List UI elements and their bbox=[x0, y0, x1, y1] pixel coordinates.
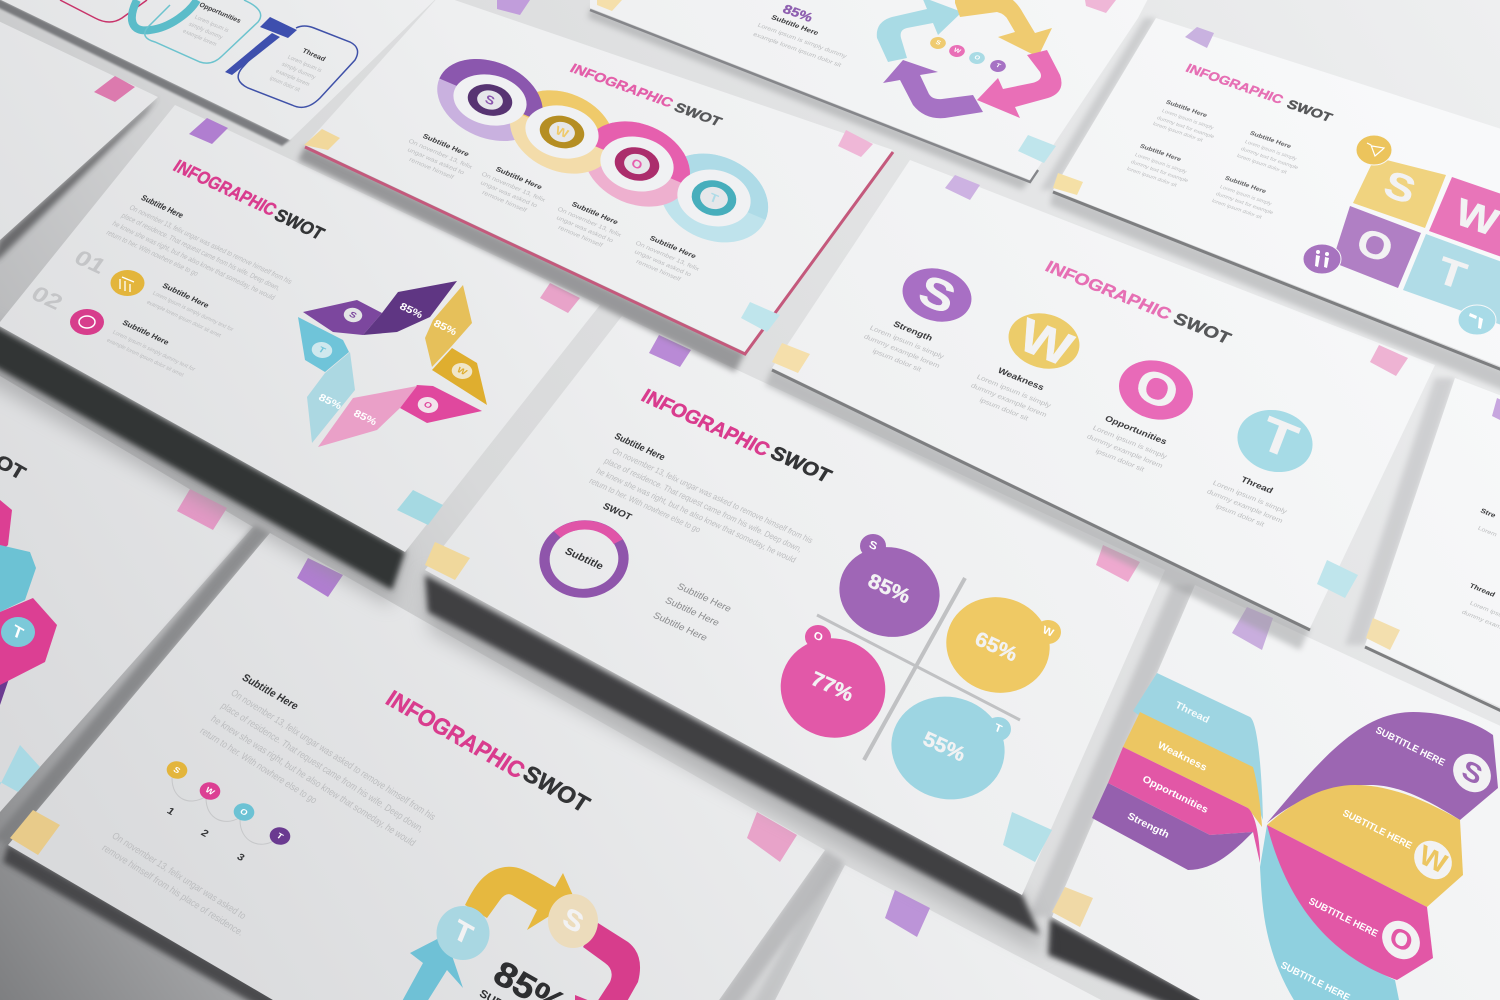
star diagram: 85% bbox=[398, 301, 425, 321]
text block: return to her. With nowhere else to go bbox=[198, 725, 319, 806]
target W: W bbox=[554, 123, 571, 141]
text columns: dummy text for example bbox=[1130, 160, 1189, 184]
numbered list: example lorem ipsum dolor sit amet bbox=[105, 337, 185, 378]
title: SWOT bbox=[766, 443, 835, 487]
hexagon stack: T bbox=[10, 620, 26, 644]
item: thread bbox=[1205, 402, 1320, 528]
text columns: Lorem ipsum is simply bbox=[1244, 140, 1298, 162]
butterfly right wing bbox=[1260, 712, 1498, 1000]
butterfly left wing: Opportunities bbox=[1140, 774, 1210, 816]
text block: place of residence. That request came from his wife. Deep down, bbox=[219, 700, 426, 835]
item: thread: Lorem ipsum is simply bbox=[1211, 479, 1289, 515]
text columns: Subtitle Here bbox=[1223, 175, 1268, 195]
tile S: S bbox=[1379, 162, 1421, 212]
text columns: Subtitle Here bbox=[1164, 99, 1209, 119]
butterfly right wing: S bbox=[1458, 754, 1486, 792]
stat: 85% bbox=[780, 1, 816, 25]
title: SWOT bbox=[1284, 97, 1336, 125]
tile O: O bbox=[1352, 219, 1398, 271]
item: weakness: Lorem ipsum is simply bbox=[975, 373, 1053, 409]
captions: On november 13, felix bbox=[634, 240, 701, 273]
swot step chain bbox=[163, 758, 294, 864]
panel: top arrow cycle slide bbox=[588, 0, 1150, 190]
labels bbox=[181, 1, 328, 93]
swot step chain: 3 bbox=[235, 851, 247, 864]
butterfly right wing: SUBTITLE HERE bbox=[1374, 725, 1446, 769]
target O: O bbox=[630, 155, 644, 173]
captions: remove himself bbox=[408, 157, 455, 181]
captions: On november 13, felix bbox=[480, 171, 547, 204]
item: opportunities: ipsum dolor sit bbox=[1094, 447, 1146, 473]
bubble O 77%: O bbox=[812, 630, 824, 644]
item: opportunities: O bbox=[1128, 357, 1186, 421]
icon: phone badge bbox=[70, 309, 104, 335]
swot step chain: 1 bbox=[165, 805, 177, 818]
stat: example lorem ipsum dolor sit bbox=[752, 31, 843, 69]
title: SWOT bbox=[671, 101, 724, 130]
numbered list: example lorem ipsum dolor sit amet bbox=[145, 299, 222, 339]
star diagram: O bbox=[422, 400, 434, 410]
panel: right edge slide: Thread bbox=[1468, 581, 1497, 599]
text block: he knew she was right, but he also knew that someday, he would bbox=[111, 220, 277, 302]
legend bbox=[651, 581, 733, 644]
arrow cycle: O bbox=[973, 54, 981, 62]
swot step chain: 2 bbox=[199, 827, 211, 840]
star diagram: 85% bbox=[352, 408, 379, 428]
tile T: T bbox=[1432, 248, 1472, 298]
item: weakness: W bbox=[1012, 308, 1080, 377]
text block: Subtitle Here bbox=[139, 193, 185, 220]
text block: Subtitle Here bbox=[612, 431, 667, 463]
hexagon stack bbox=[0, 500, 57, 705]
bubble W 65% bbox=[935, 586, 1061, 704]
item: opportunities: dummy example lorem bbox=[1085, 432, 1165, 470]
icon: people bbox=[1303, 244, 1341, 274]
target rings bbox=[425, 44, 782, 259]
captions: ungar was asked to bbox=[406, 147, 466, 176]
captions: remove himself bbox=[557, 225, 604, 249]
bubble T 55% bbox=[880, 684, 1016, 812]
tile T bbox=[1403, 234, 1500, 328]
stat: Lorem ipsum is simply dummy bbox=[756, 22, 849, 60]
text block: On november 13, felix ungar was asked to remove himself from his bbox=[610, 446, 815, 545]
item: thread: ipsum dolor sit bbox=[1214, 502, 1266, 528]
title: INFOGRAPHIC bbox=[1042, 257, 1175, 323]
arrow cycle: T bbox=[994, 63, 1002, 69]
swot step chain: S bbox=[172, 765, 183, 775]
title bbox=[1183, 61, 1336, 125]
bubble O 77% bbox=[769, 625, 897, 749]
item: weakness: Weakness bbox=[996, 366, 1046, 392]
captions: ungar was asked to bbox=[555, 215, 615, 244]
swot step chain: T bbox=[275, 831, 286, 842]
text block: return to her. With nowhere else to go bbox=[587, 476, 703, 534]
text columns: lorem ipsum dolor sit bbox=[1236, 154, 1288, 176]
captions: Subtitle Here bbox=[494, 165, 544, 191]
arrow cycle bbox=[400, 867, 640, 1000]
panel: bottom left slide with arrow cycle bbox=[0, 525, 844, 1000]
butterfly right wing: SUBTITLE HERE bbox=[1307, 896, 1379, 940]
text block: he knew she was right, but he also knew that someday, he would bbox=[209, 713, 418, 849]
legend: Subtitle Here bbox=[663, 595, 721, 629]
target O bbox=[595, 130, 679, 198]
numbered list: 01 bbox=[72, 245, 108, 280]
arrow cycle: S bbox=[934, 39, 943, 47]
numbered list: 02 bbox=[29, 281, 65, 316]
panel: top left outlined SWOT slide bbox=[0, 0, 445, 146]
item: strength bbox=[862, 261, 978, 373]
captions: On november 13, felix bbox=[407, 138, 474, 171]
donut chart: Subtitle bbox=[563, 546, 605, 572]
lower text block bbox=[100, 830, 248, 938]
lower text block: On november 13, felix ungar was asked to bbox=[110, 830, 248, 922]
text columns: dummy text for example bbox=[1240, 147, 1299, 171]
arrow cycle: S bbox=[558, 902, 588, 940]
text block: return to her. With nowhere else to go bbox=[105, 229, 200, 278]
arrow cycle: T bbox=[449, 914, 477, 952]
stat bbox=[752, 1, 849, 69]
text block: On november 13, felix ungar was asked to remove himself from his bbox=[128, 204, 294, 286]
labels: Opportunities bbox=[198, 1, 243, 25]
item: strength: ipsum dolor sit bbox=[871, 347, 923, 373]
bubble S 85%: S bbox=[867, 539, 879, 553]
panel: concentric circles slide bbox=[298, 0, 893, 372]
panel: left top blank slide bbox=[0, 17, 158, 264]
item: opportunities bbox=[1085, 352, 1200, 473]
labels: Thread bbox=[301, 47, 328, 63]
text block: Subtitle Here bbox=[240, 672, 300, 712]
captions: remove himself bbox=[481, 190, 528, 214]
text columns: Lorem ipsum is simply bbox=[1219, 185, 1273, 207]
captions: remove himself bbox=[635, 259, 682, 283]
swot step chain: O bbox=[238, 806, 250, 818]
item: strength: Strength bbox=[892, 319, 935, 343]
panel: butterfly slide bbox=[1028, 585, 1500, 1000]
text block: he knew she was right, but he also knew that someday, he would bbox=[594, 466, 798, 565]
title: INFOGRAPHIC bbox=[381, 686, 529, 784]
item: weakness: ipsum dolor sit bbox=[978, 396, 1030, 422]
text block: place of residence. That request came from his wife. Deep down, bbox=[120, 212, 282, 292]
captions: ungar was asked to bbox=[633, 249, 693, 278]
text columns: dummy text for example bbox=[1156, 116, 1215, 140]
labels: simply dummy bbox=[187, 21, 224, 41]
title bbox=[1042, 257, 1235, 348]
text block: On november 13, felix ungar was asked to remove himself from his bbox=[229, 687, 438, 823]
item: weakness bbox=[969, 306, 1086, 422]
title bbox=[381, 686, 594, 818]
text columns: lorem ipsum dolor sit bbox=[1126, 167, 1178, 189]
captions bbox=[398, 128, 707, 287]
text columns: lorem ipsum dolor sit bbox=[1152, 122, 1204, 144]
star diagram: 85% bbox=[317, 392, 344, 412]
item: opportunities: Lorem ipsum is simply bbox=[1091, 424, 1169, 460]
title bbox=[567, 62, 724, 130]
title bbox=[637, 386, 835, 487]
panel: SWOT tiles slide bbox=[1040, 18, 1500, 395]
star diagram: T bbox=[317, 345, 328, 355]
bubble T 55%: 55% bbox=[920, 728, 968, 766]
icon: letter T bbox=[225, 17, 297, 75]
bubble S 85%: 85% bbox=[865, 570, 913, 608]
numbered list: Subtitle Here bbox=[121, 319, 171, 347]
numbered list: Subtitle Here bbox=[161, 282, 211, 310]
quadrant cross bbox=[817, 578, 1020, 760]
target W bbox=[520, 99, 604, 165]
swot step chain: W bbox=[203, 785, 217, 797]
numbered list bbox=[29, 245, 235, 378]
title: INFOGRAPHIC bbox=[1183, 61, 1286, 106]
panel: left hexagon slide bbox=[0, 370, 253, 822]
legend: Subtitle Here bbox=[651, 610, 709, 644]
text columns: Lorem ipsum is simply bbox=[1161, 109, 1215, 131]
title: INFOGRAPHIC bbox=[169, 157, 280, 220]
captions: Subtitle Here bbox=[570, 200, 620, 226]
icon: tools bbox=[1458, 305, 1496, 335]
tile W bbox=[1429, 177, 1500, 260]
star diagram bbox=[298, 281, 487, 447]
item: strength: dummy example lorem bbox=[862, 332, 942, 370]
bubble W 65%: 65% bbox=[972, 628, 1020, 666]
butterfly left wing: Thread bbox=[1173, 700, 1211, 726]
arrow cycle bbox=[877, 0, 1062, 118]
numbered list: Lorem Ipsum is simply dummy text for bbox=[151, 290, 235, 333]
legend: Subtitle Here bbox=[675, 581, 733, 615]
captions: Subtitle Here bbox=[421, 132, 471, 158]
title: INFOGRAPHIC bbox=[637, 386, 774, 461]
text block: place of residence. That request came from his wife. Deep down, bbox=[602, 456, 804, 554]
item: thread: dummy example lorem bbox=[1205, 487, 1285, 525]
title: SWOT bbox=[1170, 309, 1235, 348]
icon: chart badge bbox=[110, 270, 144, 296]
butterfly right wing: W bbox=[1415, 839, 1451, 881]
butterfly right wing: SUBTITLE HERE bbox=[1341, 808, 1413, 852]
star diagram: 85% bbox=[432, 318, 459, 338]
title: SWOT bbox=[518, 761, 594, 818]
panel: bottom centre slide bbox=[750, 865, 1120, 1000]
panel: SWOT letters slide bbox=[765, 160, 1435, 650]
butterfly left wing bbox=[1092, 673, 1263, 870]
item: thread: Thread bbox=[1239, 475, 1275, 495]
text block bbox=[587, 431, 815, 565]
panel: right edge slide: Stre bbox=[1479, 506, 1497, 519]
text block bbox=[105, 193, 294, 302]
star diagram: S bbox=[347, 310, 359, 320]
labels: ipsum dolor sit bbox=[268, 75, 301, 93]
labels: example lorem bbox=[181, 28, 218, 48]
bubble S 85% bbox=[829, 534, 950, 648]
arrow cycle: W bbox=[952, 47, 963, 55]
title: SWOT bbox=[270, 206, 328, 244]
lower text block: remove himself from his place of residence. bbox=[100, 842, 246, 938]
labels: Lorem ipsum is bbox=[193, 14, 230, 34]
numbered list: Lorem Ipsum is simply dummy text for bbox=[111, 329, 197, 373]
item: strength: S bbox=[912, 266, 962, 324]
item: strength: Lorem ipsum is simply bbox=[868, 324, 946, 360]
bubble T 55%: T bbox=[993, 722, 1003, 736]
labels: example lorem bbox=[274, 68, 311, 88]
target S bbox=[449, 68, 531, 132]
bubble O 77%: 77% bbox=[808, 668, 856, 706]
bubble W 65%: W bbox=[1041, 624, 1055, 640]
item: opportunities: Opportunities bbox=[1103, 414, 1169, 446]
item: thread: T bbox=[1253, 406, 1305, 470]
butterfly left wing: Strength bbox=[1125, 811, 1171, 841]
target T bbox=[672, 163, 756, 233]
item: weakness: dummy example lorem bbox=[969, 381, 1049, 419]
text columns: Subtitle Here bbox=[1138, 143, 1183, 163]
butterfly right wing: O bbox=[1386, 921, 1416, 959]
text block bbox=[198, 672, 438, 849]
tile O bbox=[1332, 206, 1421, 288]
icon: cart bbox=[1356, 135, 1392, 165]
text columns bbox=[1126, 99, 1299, 221]
text columns: Lorem ipsum is simply bbox=[1134, 153, 1188, 175]
panel: bubble percentage slide bbox=[425, 316, 1165, 955]
target S: S bbox=[483, 92, 497, 108]
title: INFOGRAPHIC bbox=[567, 62, 676, 111]
butterfly left wing: Weakness bbox=[1156, 740, 1208, 774]
tile S bbox=[1353, 157, 1446, 228]
captions: ungar was asked to bbox=[479, 180, 539, 209]
donut chart bbox=[530, 501, 638, 605]
text columns: lorem ipsum dolor sit bbox=[1211, 199, 1263, 221]
panel: right edge slide: Lorem bbox=[1476, 525, 1498, 538]
text columns: Subtitle Here bbox=[1248, 130, 1293, 150]
labels: simply dummy bbox=[280, 61, 317, 81]
stat: Subtitle Here bbox=[770, 13, 820, 37]
captions: Subtitle Here bbox=[648, 234, 698, 260]
panel: right edge slide bbox=[1345, 378, 1500, 716]
captions: On november 13, felix bbox=[556, 206, 623, 239]
donut chart: SWOT bbox=[601, 501, 634, 523]
labels: Lorem ipsum is bbox=[286, 54, 323, 74]
text columns: dummy text for example bbox=[1215, 192, 1274, 216]
panel: star shape slide bbox=[0, 105, 600, 606]
target T: T bbox=[708, 190, 720, 206]
star diagram: W bbox=[455, 365, 469, 377]
